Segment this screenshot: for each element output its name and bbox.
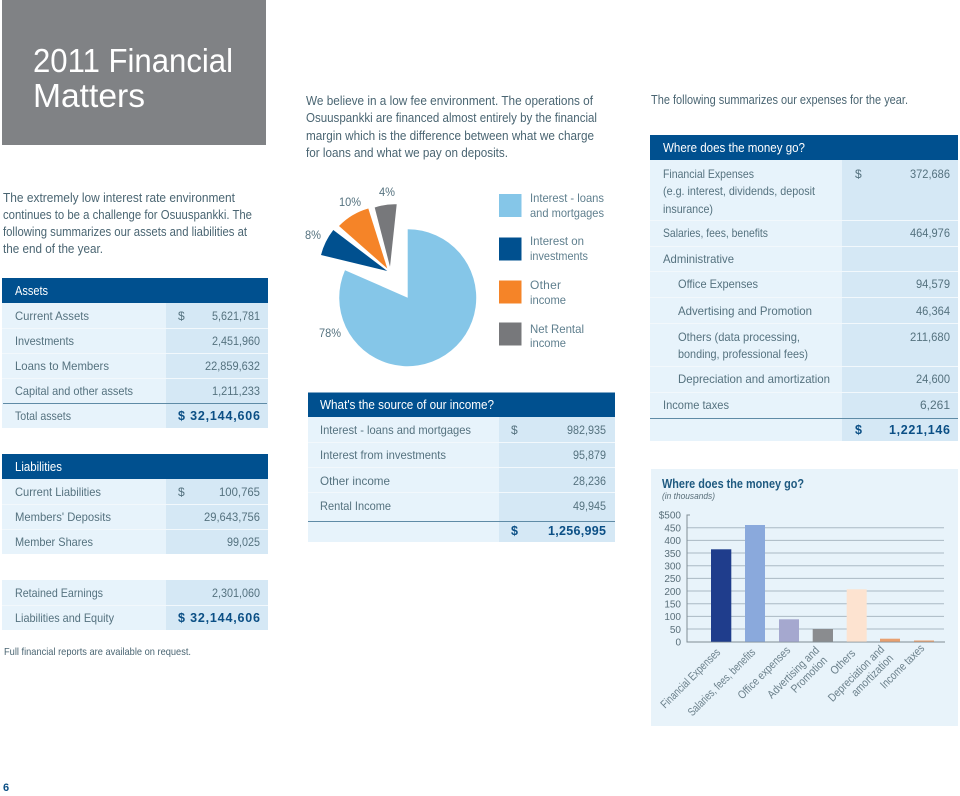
axis labels: 150 xyxy=(664,600,681,610)
panel: liabilities table: Liabilities xyxy=(15,460,62,474)
panel: expenses table: Where does the money go? xyxy=(663,141,805,155)
pie chart: 8% xyxy=(305,228,321,242)
panel: income table: Other income xyxy=(320,474,390,488)
panel: equity table: $ 32,144,606 xyxy=(178,611,260,625)
pie legend: income xyxy=(530,336,566,350)
axis labels: 250 xyxy=(664,574,681,585)
category labels: Financial Expenses xyxy=(659,647,723,711)
axis labels: 400 xyxy=(664,536,681,547)
panel: expenses table xyxy=(650,135,958,441)
pie legend: Other xyxy=(530,278,561,292)
pie legend: income xyxy=(530,293,566,307)
panel: expenses table: Others (data processing, xyxy=(678,330,800,344)
panel: expenses table: $ xyxy=(855,423,862,437)
panel: income table: Interest - loans and mortgages xyxy=(320,423,471,437)
category labels: Others xyxy=(828,647,858,677)
expenses intro: The following summarizes our expenses for the year. xyxy=(651,93,908,107)
panel: bar chart xyxy=(651,469,958,726)
intro paragraph: The extremely low interest rate environment xyxy=(3,191,235,205)
panel: assets table: Assets xyxy=(15,284,48,298)
panel: expenses table: 24,600 xyxy=(916,372,950,386)
pie legend: and mortgages xyxy=(530,206,604,220)
panel: expenses table: 372,686 xyxy=(910,167,950,181)
intro paragraph xyxy=(3,191,252,256)
axis labels: 50 xyxy=(670,625,681,636)
middle paragraph: for loans and what we pay on deposits. xyxy=(306,146,508,160)
panel: income table: 982,935 xyxy=(567,423,606,437)
axis labels: 0 xyxy=(675,638,681,648)
panel: expenses table: 6,261 xyxy=(920,398,950,412)
panel: liabilities table: Current Liabilities xyxy=(15,485,101,499)
pie legend: investments xyxy=(530,249,588,263)
panel: expenses table: $ xyxy=(855,167,862,181)
category labels xyxy=(659,642,927,719)
panel: equity table: Retained Earnings xyxy=(15,586,103,600)
title block: 2011 Financial xyxy=(33,42,233,79)
panel: income table: $ xyxy=(511,423,518,437)
category labels: amortization xyxy=(849,653,896,699)
page number: 6 xyxy=(3,782,9,794)
panel: equity table xyxy=(2,580,268,630)
panel: expenses table: 211,680 xyxy=(910,330,950,344)
intro paragraph: continues to be a challenge for Osuuspankki. The xyxy=(3,208,252,222)
panel: assets table: Current Assets xyxy=(15,309,89,323)
panel: income table: What's the source of our income? xyxy=(320,398,494,412)
panel: assets table: Total assets xyxy=(15,409,71,423)
pie legend: Net Rental xyxy=(530,322,584,336)
panel: expenses table: Income taxes xyxy=(663,398,729,412)
panel: assets table: 2,451,960 xyxy=(212,334,260,348)
panel: income table: $ xyxy=(511,524,518,538)
panel: income table: Rental Income xyxy=(320,499,391,513)
panel: income table: 95,879 xyxy=(573,448,606,462)
panel: income table: Interest from investments xyxy=(320,448,446,462)
title block: Matters xyxy=(33,77,145,114)
category labels: Salaries, fees, benefits xyxy=(686,647,758,719)
axis labels: $500 xyxy=(659,510,681,522)
panel: bar chart: Where does the money go? xyxy=(662,477,804,491)
panel: liabilities table: Members' Deposits xyxy=(15,510,111,524)
panel: assets table: 1,211,233 xyxy=(212,384,260,398)
footnote: Full financial reports are available on request. xyxy=(4,646,191,658)
panel: equity table: 2,301,060 xyxy=(212,586,260,600)
bars xyxy=(711,525,934,642)
pie chart xyxy=(305,185,476,366)
panel: expenses table: bonding, professional fees) xyxy=(678,347,808,361)
panel: bar chart: (in thousands) xyxy=(662,491,715,502)
panel: income table: 49,945 xyxy=(573,499,606,513)
panel: expenses table: Depreciation and amortization xyxy=(678,372,830,386)
panel: expenses table: Administrative xyxy=(663,252,734,266)
middle paragraph: We believe in a low fee environment. The operations of xyxy=(306,94,593,108)
panel: expenses table: 46,364 xyxy=(916,304,950,318)
axis labels: 450 xyxy=(664,524,681,534)
pie chart: 10% xyxy=(339,195,361,209)
title block xyxy=(2,0,266,145)
panel: assets table: Loans to Members xyxy=(15,359,109,373)
panel: expenses table: 94,579 xyxy=(916,277,950,291)
pie chart: 78% xyxy=(319,326,341,340)
middle paragraph: Osuuspankki are financed almost entirely by the financial xyxy=(306,111,597,125)
panel: income table xyxy=(308,392,615,542)
panel: expenses table: insurance) xyxy=(663,202,713,216)
panel: equity table: Liabilities and Equity xyxy=(15,611,114,625)
panel: assets table xyxy=(2,278,268,428)
panel: expenses table: Advertising and Promotion xyxy=(678,304,812,318)
panel: liabilities table: 99,025 xyxy=(227,535,260,549)
intro paragraph: the end of the year. xyxy=(3,242,103,256)
axis labels: 350 xyxy=(664,549,681,560)
panel: assets table: 22,859,632 xyxy=(205,359,260,373)
panel: liabilities table: 29,643,756 xyxy=(204,510,260,524)
panel: expenses table: Office Expenses xyxy=(678,277,758,291)
panel: assets table: $ 32,144,606 xyxy=(178,409,260,423)
panel: expenses table: Financial Expenses xyxy=(663,167,754,181)
middle paragraph xyxy=(306,94,597,160)
panel: assets table: $ xyxy=(178,309,185,323)
axis labels: 100 xyxy=(664,612,681,623)
pie chart: 4% xyxy=(379,185,395,199)
panel: income table: 28,236 xyxy=(573,474,606,488)
panel: assets table: Capital and other assets xyxy=(15,384,133,398)
category labels: Income taxes xyxy=(878,642,927,691)
category labels: Advertising and xyxy=(766,645,822,701)
panel: liabilities table: Member Shares xyxy=(15,535,93,549)
axis labels: 300 xyxy=(664,562,681,572)
panel: expenses table: (e.g. interest, dividends, deposit xyxy=(663,184,816,198)
panel: liabilities table: 100,765 xyxy=(219,485,260,499)
panel: assets table: Investments xyxy=(15,334,74,348)
category labels: Depreciation and xyxy=(826,644,887,704)
pie legend xyxy=(499,191,604,350)
panel: assets table: 5,621,781 xyxy=(212,309,260,323)
category labels: Office expenses xyxy=(736,644,793,702)
axis labels xyxy=(659,510,681,648)
pie legend: Interest - loans xyxy=(530,191,604,205)
pie legend: Interest on xyxy=(530,234,584,248)
panel: liabilities table: $ xyxy=(178,485,185,499)
panel: expenses table: Salaries, fees, benefits xyxy=(663,226,768,240)
middle paragraph: margin which is the difference between what we charge xyxy=(306,129,594,143)
panel: income table: 1,256,995 xyxy=(548,524,606,538)
category labels: Promotion xyxy=(789,655,830,696)
intro paragraph: following summarizes our assets and liabilities at xyxy=(3,225,247,239)
axis labels: 200 xyxy=(664,587,681,598)
panel: expenses table: 1,221,146 xyxy=(889,423,950,437)
panel: expenses table: 464,976 xyxy=(910,226,950,240)
panel: liabilities table xyxy=(2,454,268,554)
